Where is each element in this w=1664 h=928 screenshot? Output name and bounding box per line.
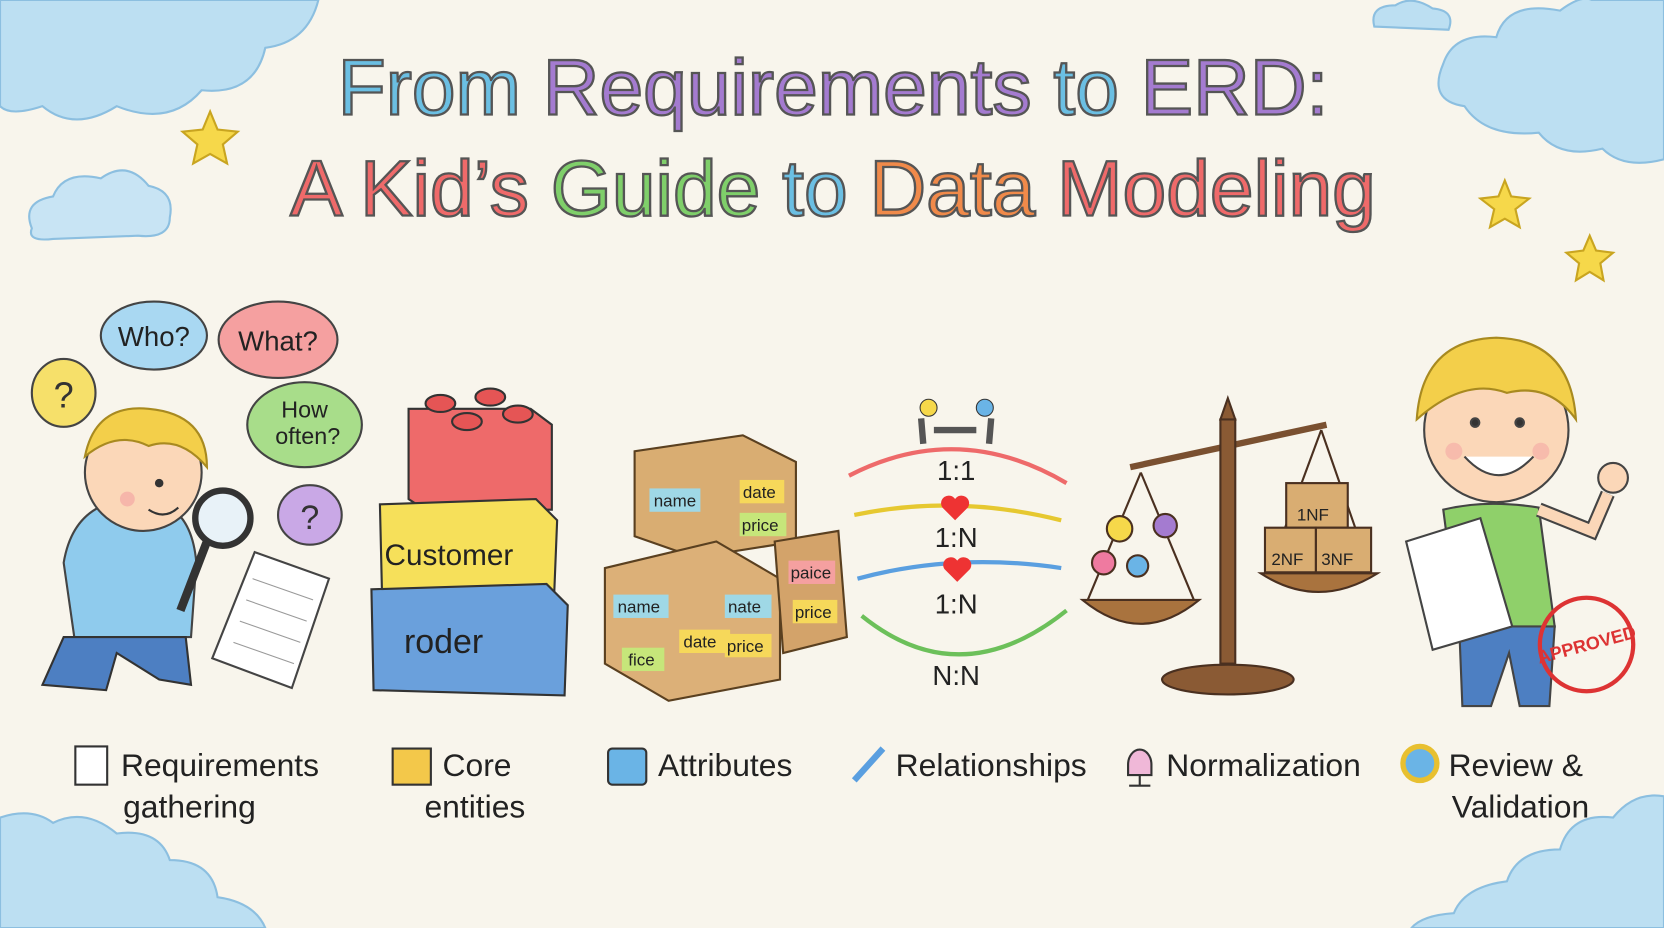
panel: attribute boxes: date (683, 633, 716, 652)
panel: review kid (1406, 338, 1638, 706)
title: A Kid’s Guide to Data Modeling (290, 145, 1376, 233)
speech bubbles: ? (300, 499, 319, 537)
label: core entities: Core (443, 747, 512, 783)
speech bubbles: ? (54, 375, 74, 416)
kid body (64, 499, 196, 637)
panel: attribute boxes: price (795, 603, 832, 622)
label: requirements (75, 746, 319, 825)
label: relationships: Relationships (896, 747, 1087, 783)
cloud: bottom right (1411, 795, 1664, 928)
speech bubbles: often? (275, 423, 340, 449)
panel: attribute boxes: name (654, 491, 696, 510)
label: review: Validation (1452, 789, 1589, 825)
panel: attribute boxes: price (742, 516, 779, 535)
panel: normalization scale (1082, 398, 1377, 694)
label: normalization: Normalization (1166, 747, 1361, 783)
panel: relationships (849, 399, 1067, 691)
panel: relationships: 1:1 (937, 455, 975, 486)
label: review (1403, 746, 1589, 825)
panel: attribute boxes: fice (628, 651, 655, 670)
panel: lego entities: Customer (385, 539, 513, 572)
stars (183, 111, 1613, 280)
panel: relationships: 1:N (935, 589, 978, 620)
panel: lego entities (371, 389, 568, 695)
cloud: top right (1373, 0, 1664, 163)
label: core entities: entities (424, 789, 525, 825)
speech bubbles: Who? (118, 321, 190, 352)
title: From Requirements to ERD: (338, 44, 1328, 132)
speech bubbles (32, 302, 362, 545)
title (290, 44, 1376, 233)
panel: lego entities: roder (404, 623, 483, 661)
panel: normalization scale: 3NF (1321, 550, 1353, 569)
label: attributes: Attributes (658, 747, 792, 783)
panel: attribute boxes: nate (728, 598, 761, 617)
label: requirements: gathering (123, 789, 256, 825)
label: review: Review & (1449, 747, 1583, 783)
cloud: top left (0, 0, 318, 119)
panel: review kid: APPROVED (1535, 622, 1638, 668)
panel: relationships: N:N (932, 660, 980, 691)
panel: attribute boxes: name (618, 598, 660, 617)
panel: attribute boxes: date (743, 483, 776, 502)
panel: normalization scale: 1NF (1297, 505, 1329, 524)
speech bubbles: What? (238, 325, 318, 356)
speech bubbles: How (281, 396, 328, 422)
panel: attribute boxes: paice (791, 564, 831, 583)
cloud: small left (29, 170, 171, 239)
panel: attribute boxes: price (727, 637, 764, 656)
notebook (212, 552, 329, 688)
panel: attribute boxes (605, 435, 847, 701)
panel: relationships: 1:N (935, 522, 978, 553)
panel: requirements kid (32, 302, 362, 690)
label: core entities (393, 747, 525, 825)
panel: normalization scale: 2NF (1271, 550, 1303, 569)
cloud: bottom left (0, 813, 265, 928)
labels (75, 746, 1589, 825)
label: requirements: Requirements (121, 747, 319, 783)
